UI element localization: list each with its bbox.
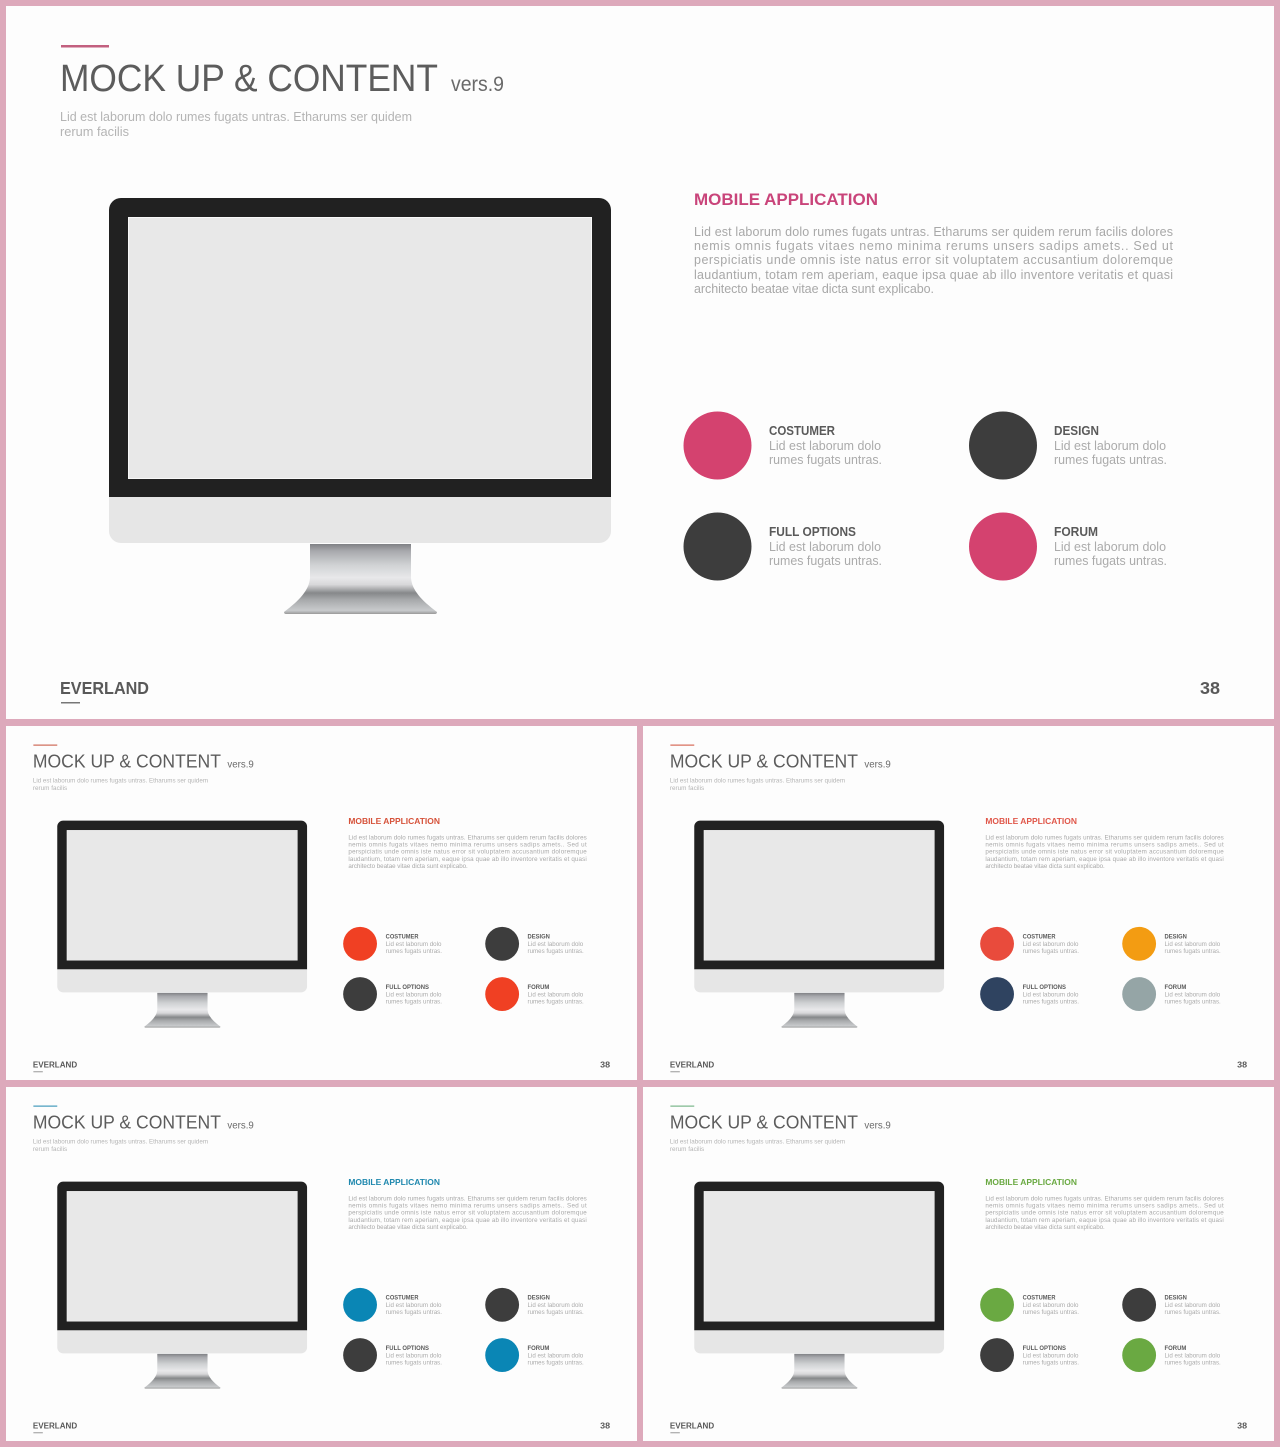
feature: design: DESIGN xyxy=(1165,934,1187,941)
text block: mobile application: nemis omnis fugats vitaes nemo minima rerums unsers sadips amets.. Sed ut xyxy=(985,842,1224,849)
heading block: MOCK UP & CONTENT xyxy=(33,751,221,772)
footer brand: EVERLAND xyxy=(60,678,149,698)
text block: mobile application: architecto beatae vitae dicta sunt explicabo. xyxy=(348,1224,468,1231)
text block: mobile application: nemis omnis fugats vitaes nemo minima rerums unsers sadips amets.. Sed ut xyxy=(694,239,1174,253)
heading block: rerum facilis xyxy=(33,785,67,792)
feature: costumer: Lid est laborum dolo xyxy=(769,439,881,453)
text block: mobile application: Lid est laborum dolo rumes fugats untras. Etharums ser quidem rerum facilis dolores xyxy=(348,835,587,842)
text block: mobile application: nemis omnis fugats vitaes nemo minima rerums unsers sadips amets.. Sed ut xyxy=(348,842,587,849)
text block: mobile application xyxy=(985,1177,1224,1231)
text block: mobile application: Lid est laborum dolo rumes fugats untras. Etharums ser quidem rerum facilis dolores xyxy=(985,1196,1224,1203)
feature: design xyxy=(969,412,1167,480)
feature: forum xyxy=(485,977,584,1011)
text block: mobile application: laudantium, totam rem aperiam, eaque ipsa quae ab illo inventore veritatis et quasi xyxy=(694,268,1173,282)
feature: costumer: COSTUMER xyxy=(386,1295,419,1302)
heading block: Lid est laborum dolo rumes fugats untras. Etharums ser quidem xyxy=(33,1138,208,1145)
feature: forum xyxy=(1122,1338,1221,1372)
feature: costumer: COSTUMER xyxy=(386,934,419,941)
feature: full options: FULL OPTIONS xyxy=(769,524,856,539)
feature: full options: Lid est laborum dolo xyxy=(386,991,442,998)
feature: full options: Lid est laborum dolo xyxy=(769,540,881,554)
feature: costumer xyxy=(343,927,442,961)
feature: costumer: rumes fugats untras. xyxy=(1023,948,1079,955)
feature: costumer xyxy=(980,1288,1079,1322)
feature: full options xyxy=(343,1338,442,1372)
page number: 38 xyxy=(600,1059,610,1069)
feature: full options: FULL OPTIONS xyxy=(1023,1345,1067,1352)
heading block: rerum facilis xyxy=(33,1146,67,1153)
feature: design: Lid est laborum dolo xyxy=(528,941,584,948)
feature: full options: FULL OPTIONS xyxy=(386,984,430,991)
feature: full options: Lid est laborum dolo xyxy=(386,1352,442,1359)
page number: 38 xyxy=(1237,1059,1247,1069)
feature: costumer: Lid est laborum dolo xyxy=(1023,941,1079,948)
panel: small slide, red theme xyxy=(6,726,637,1080)
feature: forum: FORUM xyxy=(1165,1345,1186,1352)
feature: full options: rumes fugats untras. xyxy=(386,998,442,1005)
text block: mobile application: MOBILE APPLICATION xyxy=(985,816,1077,826)
feature: full options: Lid est laborum dolo xyxy=(1023,1352,1079,1359)
monitor mockup xyxy=(694,1182,944,1389)
page number: 38 xyxy=(1237,1420,1247,1430)
text block: mobile application xyxy=(985,816,1224,870)
monitor mockup xyxy=(109,198,611,614)
text block: mobile application: nemis omnis fugats vitaes nemo minima rerums unsers sadips amets.. Sed ut xyxy=(985,1203,1224,1210)
feature: costumer: rumes fugats untras. xyxy=(386,948,442,955)
feature: full options: rumes fugats untras. xyxy=(769,554,882,568)
text block: mobile application: Lid est laborum dolo rumes fugats untras. Etharums ser quidem rerum facilis dolores xyxy=(694,225,1173,239)
heading block: MOCK UP & CONTENT xyxy=(670,751,858,772)
feature: costumer: COSTUMER xyxy=(1023,934,1056,941)
panel: small slide, multicolor theme xyxy=(643,726,1274,1080)
feature: costumer: rumes fugats untras. xyxy=(769,453,882,467)
feature: full options: Lid est laborum dolo xyxy=(1023,991,1079,998)
heading block: Lid est laborum dolo rumes fugats untras. Etharums ser quidem xyxy=(670,777,845,784)
feature: full options: FULL OPTIONS xyxy=(386,1345,430,1352)
text block: mobile application: nemis omnis fugats vitaes nemo minima rerums unsers sadips amets.. Sed ut xyxy=(348,1203,587,1210)
heading block xyxy=(33,745,254,792)
heading block: MOCK UP & CONTENT xyxy=(33,1112,221,1133)
feature: design: rumes fugats untras. xyxy=(1054,453,1167,467)
feature: forum: rumes fugats untras. xyxy=(528,998,584,1005)
heading block: vers.9 xyxy=(864,759,891,770)
feature: forum: rumes fugats untras. xyxy=(528,1359,584,1366)
heading block: Lid est laborum dolo rumes fugats untras. Etharums ser quidem xyxy=(60,110,412,124)
text block: mobile application: perspiciatis unde omnis iste natus error sit voluptatem accusantium doloremque xyxy=(985,1209,1224,1216)
heading block xyxy=(670,1106,891,1153)
feature: design: DESIGN xyxy=(528,1295,550,1302)
feature: design: DESIGN xyxy=(1054,423,1099,438)
feature: costumer: COSTUMER xyxy=(769,423,836,438)
text block: mobile application xyxy=(348,1177,587,1231)
text block: mobile application: MOBILE APPLICATION xyxy=(348,816,440,826)
feature: costumer: COSTUMER xyxy=(1023,1295,1056,1302)
footer brand: EVERLAND xyxy=(33,1420,77,1430)
feature: forum: Lid est laborum dolo xyxy=(528,991,584,998)
feature: design: rumes fugats untras. xyxy=(528,948,584,955)
feature: design: DESIGN xyxy=(528,934,550,941)
text block: mobile application: MOBILE APPLICATION xyxy=(694,190,878,209)
text block: mobile application: laudantium, totam rem aperiam, eaque ipsa quae ab illo inventore veritatis et quasi xyxy=(348,1217,587,1224)
feature: full options: rumes fugats untras. xyxy=(1023,998,1079,1005)
feature: forum: FORUM xyxy=(1165,984,1186,991)
feature: costumer: rumes fugats untras. xyxy=(386,1309,442,1316)
feature: forum: rumes fugats untras. xyxy=(1054,554,1167,568)
text block: mobile application: architecto beatae vitae dicta sunt explicabo. xyxy=(985,863,1105,870)
feature: costumer xyxy=(684,412,882,480)
monitor mockup xyxy=(694,821,944,1028)
feature: full options: rumes fugats untras. xyxy=(1023,1359,1079,1366)
feature: costumer xyxy=(343,1288,442,1322)
feature: full options: FULL OPTIONS xyxy=(1023,984,1067,991)
heading block: rerum facilis xyxy=(670,1146,704,1153)
feature: costumer: Lid est laborum dolo xyxy=(1023,1302,1079,1309)
heading block xyxy=(33,1106,254,1153)
feature: design xyxy=(485,927,584,961)
text block: mobile application: architecto beatae vitae dicta sunt explicabo. xyxy=(985,1224,1105,1231)
heading block: Lid est laborum dolo rumes fugats untras. Etharums ser quidem xyxy=(670,1138,845,1145)
panel: main slide, pink theme xyxy=(6,6,1274,719)
feature: full options xyxy=(343,977,442,1011)
feature: design xyxy=(1122,1288,1221,1322)
feature: design: rumes fugats untras. xyxy=(1165,948,1221,955)
feature: forum: Lid est laborum dolo xyxy=(1165,1352,1221,1359)
text block: mobile application: MOBILE APPLICATION xyxy=(985,1177,1077,1187)
footer brand: EVERLAND xyxy=(33,1059,77,1069)
footer brand: EVERLAND xyxy=(670,1059,714,1069)
text block: mobile application: perspiciatis unde omnis iste natus error sit voluptatem accusantium doloremque xyxy=(985,848,1224,855)
heading block xyxy=(60,45,504,139)
text block: mobile application: architecto beatae vitae dicta sunt explicabo. xyxy=(348,863,468,870)
heading block: vers.9 xyxy=(227,1120,254,1131)
feature: full options: rumes fugats untras. xyxy=(386,1359,442,1366)
feature: design: Lid est laborum dolo xyxy=(528,1302,584,1309)
text block: mobile application: architecto beatae vitae dicta sunt explicabo. xyxy=(694,282,934,296)
heading block xyxy=(670,745,891,792)
feature: design xyxy=(1122,927,1221,961)
feature: full options xyxy=(684,512,882,580)
heading block: Lid est laborum dolo rumes fugats untras. Etharums ser quidem xyxy=(33,777,208,784)
monitor mockup xyxy=(57,1182,307,1389)
panel: small slide, green theme xyxy=(643,1087,1274,1441)
feature: forum: rumes fugats untras. xyxy=(1165,1359,1221,1366)
footer brand: EVERLAND xyxy=(670,1420,714,1430)
heading block: vers.9 xyxy=(864,1120,891,1131)
feature: full options xyxy=(980,1338,1079,1372)
heading block: rerum facilis xyxy=(670,785,704,792)
feature: forum xyxy=(485,1338,584,1372)
text block: mobile application: perspiciatis unde omnis iste natus error sit voluptatem accusantium doloremque xyxy=(348,1209,587,1216)
feature: costumer xyxy=(980,927,1079,961)
feature: forum: Lid est laborum dolo xyxy=(528,1352,584,1359)
page number: 38 xyxy=(1200,678,1220,698)
heading block: MOCK UP & CONTENT xyxy=(60,58,438,100)
feature: costumer: Lid est laborum dolo xyxy=(386,1302,442,1309)
heading block: vers.9 xyxy=(451,73,504,96)
heading block: vers.9 xyxy=(227,759,254,770)
heading block: rerum facilis xyxy=(60,125,129,139)
feature: forum: rumes fugats untras. xyxy=(1165,998,1221,1005)
text block: mobile application xyxy=(694,190,1174,296)
text block: mobile application: laudantium, totam rem aperiam, eaque ipsa quae ab illo inventore veritatis et quasi xyxy=(348,856,587,863)
feature: design: rumes fugats untras. xyxy=(1165,1309,1221,1316)
feature: design: rumes fugats untras. xyxy=(528,1309,584,1316)
text block: mobile application: laudantium, totam rem aperiam, eaque ipsa quae ab illo inventore veritatis et quasi xyxy=(985,856,1224,863)
feature: forum: FORUM xyxy=(1054,524,1098,539)
feature: design: DESIGN xyxy=(1165,1295,1187,1302)
feature: forum: Lid est laborum dolo xyxy=(1054,540,1166,554)
heading block: MOCK UP & CONTENT xyxy=(670,1112,858,1133)
feature: design: Lid est laborum dolo xyxy=(1165,1302,1221,1309)
monitor mockup xyxy=(57,821,307,1028)
text block: mobile application: Lid est laborum dolo rumes fugats untras. Etharums ser quidem rerum facilis dolores xyxy=(348,1196,587,1203)
page number: 38 xyxy=(600,1420,610,1430)
feature: design: Lid est laborum dolo xyxy=(1165,941,1221,948)
text block: mobile application: Lid est laborum dolo rumes fugats untras. Etharums ser quidem rerum facilis dolores xyxy=(985,835,1224,842)
feature: design: Lid est laborum dolo xyxy=(1054,439,1166,453)
panel: small slide, blue theme xyxy=(6,1087,637,1441)
text block: mobile application: MOBILE APPLICATION xyxy=(348,1177,440,1187)
feature: costumer: rumes fugats untras. xyxy=(1023,1309,1079,1316)
text block: mobile application: perspiciatis unde omnis iste natus error sit voluptatem accusantium doloremque xyxy=(694,253,1173,267)
feature: forum: FORUM xyxy=(528,1345,549,1352)
feature: forum xyxy=(1122,977,1221,1011)
feature: design xyxy=(485,1288,584,1322)
feature: forum: FORUM xyxy=(528,984,549,991)
text block: mobile application: laudantium, totam rem aperiam, eaque ipsa quae ab illo inventore veritatis et quasi xyxy=(985,1217,1224,1224)
feature: full options xyxy=(980,977,1079,1011)
text block: mobile application xyxy=(348,816,587,870)
feature: forum xyxy=(969,512,1167,580)
feature: costumer: Lid est laborum dolo xyxy=(386,941,442,948)
text block: mobile application: perspiciatis unde omnis iste natus error sit voluptatem accusantium doloremque xyxy=(348,848,587,855)
feature: forum: Lid est laborum dolo xyxy=(1165,991,1221,998)
